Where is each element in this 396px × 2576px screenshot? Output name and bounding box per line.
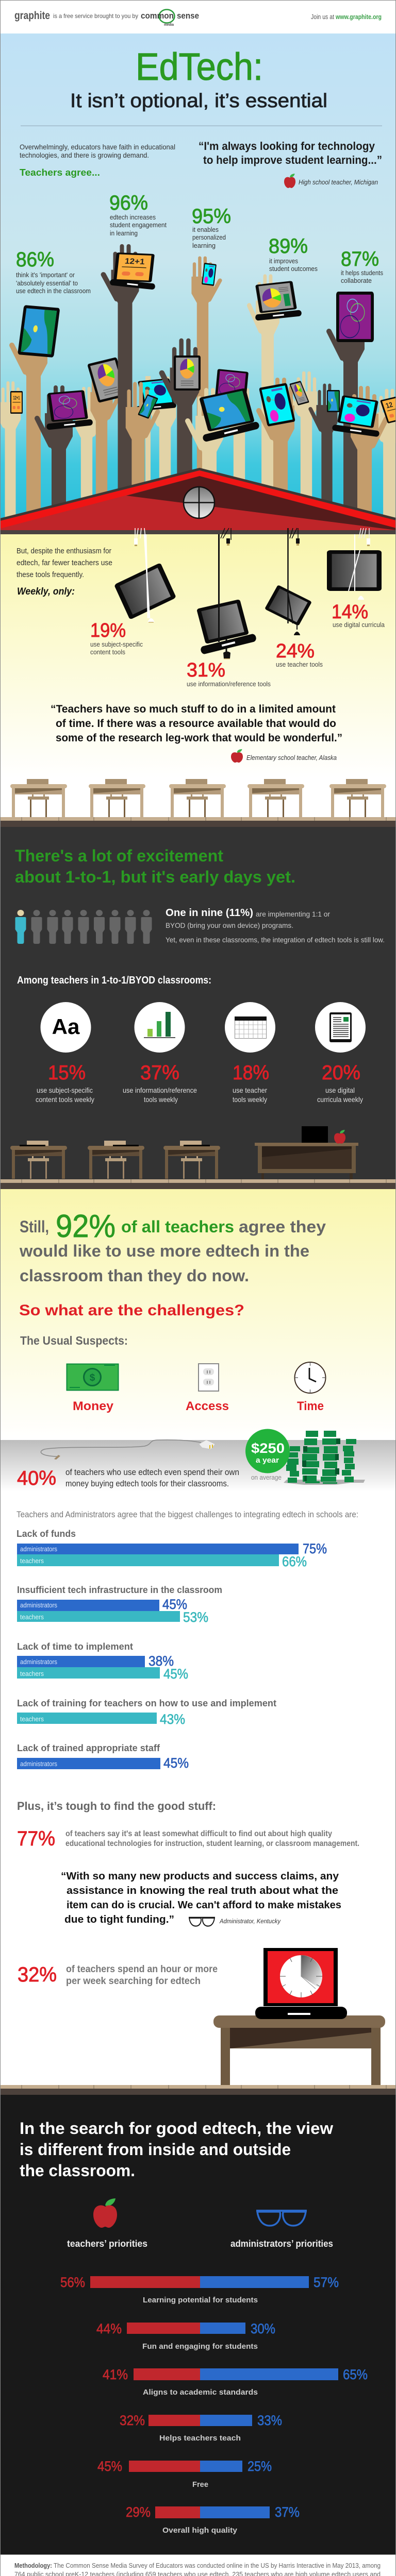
heading: tough to find: Plus, it’s tough to find the good stuff: — [17, 1800, 216, 1812]
stat: 18%: tools weekly — [233, 1095, 267, 1104]
chart: insufficient infrastructure — [17, 1585, 222, 1625]
hand: tan, network tablet — [259, 380, 295, 673]
stat: 86% — [16, 248, 91, 295]
hand: dark, math laptop: 12+1 — [124, 256, 145, 266]
logo: common sense media: media — [164, 23, 174, 27]
intro text: weekly use: But, despite the enthusiasm for — [16, 547, 111, 555]
panel: priorities (black) — [0, 2095, 396, 2554]
badge: $250 a year — [245, 1429, 290, 1473]
stat: 89%: it improves — [269, 258, 298, 265]
chart: lack of time: Lack of time to implement — [17, 1641, 133, 1652]
bar: learning potential: 57% — [314, 2275, 339, 2290]
bar: academic standards: 41% — [103, 2367, 128, 2382]
hand: tan, phone — [191, 258, 220, 472]
stat: 15% — [36, 1062, 94, 1104]
stat: 31%: use information/reference tools — [187, 681, 271, 688]
bar: fun and engaging: Fun and engaging for students — [142, 2342, 258, 2351]
stat: 37%: tools weekly — [144, 1095, 178, 1104]
icon: money stack — [284, 1431, 365, 1485]
bar: fun and engaging: 30% — [251, 2321, 275, 2336]
chart: insufficient infrastructure: Insufficient tech infrastructure in the classroom — [17, 1585, 222, 1595]
statement: 92% of teachers: Still, — [20, 1217, 49, 1236]
label: teachers' priorities: teachers’ priorities — [67, 2239, 147, 2249]
bar: fun and engaging: 44% — [96, 2321, 122, 2336]
heading: among teachers: Among teachers in 1-to-1/BYOD classrooms: — [17, 975, 211, 986]
roof with window — [0, 468, 396, 534]
heading: 1-to-1 — [15, 846, 295, 886]
intro text: weekly use: these tools frequently. — [16, 571, 84, 579]
statement: 92% of teachers: would like to use more edtech in the — [19, 1242, 309, 1260]
classroom desks row — [0, 779, 396, 827]
badge: $250 a year: a year — [256, 1456, 279, 1465]
stat: 19%: use subject-specific — [90, 641, 143, 648]
chart: lack of time: 45% — [163, 1666, 188, 1682]
stat: 86%: 'absolutely essential' to — [16, 280, 78, 287]
quote attribution: High school teacher, Michigan — [299, 179, 378, 186]
text: one in nine: are implementing 1:1 or — [256, 910, 330, 918]
stat: 15%: 15% — [48, 1062, 86, 1084]
chart: lack of time: teachers — [20, 1670, 44, 1677]
laptop on teacher desk — [302, 1126, 328, 1143]
methodology text — [0, 2554, 396, 2576]
stat: 95%: personalized — [192, 234, 226, 241]
heading: good edtech: In the search for good edtech, the view — [20, 2119, 333, 2138]
phone: pie — [289, 381, 309, 405]
chart: lack of training: 43% — [160, 1711, 185, 1727]
stat: 18%: 18% — [233, 1062, 269, 1084]
label: access: Access — [186, 1399, 229, 1413]
stat: 19%: content tools — [90, 649, 125, 656]
stat: 14%: use digital curricula — [333, 621, 385, 629]
round window — [184, 487, 214, 518]
label: administrators' priorities: administrators’ priorities — [230, 2239, 333, 2249]
statement: 92% of teachers: classroom than they do now. — [20, 1266, 249, 1285]
chart: insufficient infrastructure: teachers — [20, 1613, 44, 1621]
panel: grey fade — [0, 1440, 396, 1492]
stat: 14% — [332, 601, 385, 629]
icon: glasses, administrators — [256, 2211, 307, 2226]
bar: fun and engaging — [96, 2321, 275, 2351]
quote: Michigan teacher: “I'm always looking for technology — [199, 140, 375, 152]
chart: lack of funds: teachers — [20, 1557, 44, 1565]
bar: learning potential: 56% — [60, 2275, 85, 2290]
stat: 96%: edtech increases — [110, 214, 156, 221]
label: on average: on average — [251, 1474, 282, 1481]
chart: lack of funds: 75% — [303, 1541, 327, 1556]
stat: 37%: 37% — [140, 1062, 179, 1084]
chart: insufficient infrastructure: 53% — [183, 1609, 208, 1625]
chart: lack of staff — [17, 1743, 189, 1771]
text: biggest challenges intro: Teachers and Administrators agree that the biggest challenges to integrating edtech in schools are: — [16, 1510, 358, 1519]
hand: light, small math phone — [0, 383, 23, 603]
stat: 37%: use information/reference — [123, 1086, 197, 1094]
stat: 95%: learning — [192, 242, 216, 249]
statement: 92% of teachers: 92% — [56, 1209, 116, 1244]
stat: 86%: use edtech in the classroom — [16, 287, 91, 295]
stat: 19%: 19% — [90, 620, 126, 641]
tablet: math at right edge: 12 — [385, 400, 394, 410]
stat: 40%: of teachers who use edtech even spend their own — [65, 1468, 239, 1477]
icon: cord and plug — [41, 1440, 215, 1460]
label: time: Time — [297, 1399, 324, 1413]
intro text: Overwhelmingly, educators have faith in educational — [20, 143, 175, 151]
quote: Alaska teacher: of time. If there was a resource available that would do — [56, 718, 336, 730]
stat: 15%: content tools weekly — [36, 1095, 94, 1104]
hand: dark, venn laptop — [37, 387, 93, 681]
icon: apple on teacher desk — [334, 1130, 345, 1144]
bar: high quality: 37% — [275, 2504, 300, 2520]
chart: lack of training — [17, 1698, 276, 1727]
hanging laptop: 31% — [196, 534, 257, 659]
quote: Michigan teacher — [199, 140, 382, 166]
stat: 31%: 31% — [187, 659, 225, 681]
text: one in nine: Yet, even in these classrooms, the integration of edtech tools is still low. — [166, 936, 385, 944]
title: EdTech: — [136, 45, 263, 88]
heading: good edtech: is different from inside and outside — [20, 2140, 291, 2159]
badge: $250 a year: $250 — [251, 1440, 285, 1456]
hanging tablet: 19% — [114, 534, 176, 622]
laptop — [255, 1948, 347, 2019]
chart: lack of training: Lack of training for teachers on how to use and implement — [17, 1698, 276, 1708]
header link — [311, 13, 382, 21]
stat: 18% — [233, 1062, 269, 1104]
logo: graphite: graphite — [14, 10, 50, 22]
icon: tablet circle — [315, 1002, 366, 1053]
stat: 87% — [341, 248, 383, 284]
icon: calendar circle — [225, 1002, 275, 1053]
bar: learning potential: Learning potential for students — [143, 2296, 258, 2304]
illustration: laptop clock on desk — [213, 1948, 385, 2085]
stat: 95%: 95% — [192, 205, 231, 228]
bar: free: Free — [192, 2480, 208, 2489]
quote attribution: Administrator, Kentucky — [219, 1919, 281, 1925]
stat: 95%: it enables — [192, 226, 219, 233]
stat: 77%: 77% — [17, 1827, 55, 1850]
stat: 32% — [18, 1963, 218, 1987]
stat: 96%: in learning — [110, 230, 138, 237]
heading: 1-to-1: There's a lot of excitement — [15, 846, 223, 865]
bar: learning potential — [60, 2275, 339, 2304]
hand: tan, map tablet — [12, 305, 60, 608]
logo: common sense media: common — [141, 11, 174, 21]
bar: helps teachers: 33% — [257, 2413, 282, 2428]
chart: lack of funds — [16, 1529, 327, 1569]
stat: 89% — [269, 235, 318, 273]
stat: 40% — [17, 1467, 239, 1489]
people icons: one in nine — [15, 910, 152, 944]
bar: free: 45% — [97, 2459, 122, 2474]
stat: 18%: use teacher — [233, 1086, 267, 1094]
stat: 24%: 24% — [276, 640, 315, 662]
text: one in nine: BYOD (bring your own device) programs. — [166, 921, 293, 929]
quote: Kentucky administrator: assistance in knowing the real truth about what the — [67, 1885, 338, 1896]
stat: 32%: of teachers spend an hour or more — [66, 1964, 218, 1975]
hanging tablet: 14% — [327, 534, 382, 600]
label: money: Money — [73, 1399, 114, 1413]
chart: lack of funds: administrators — [20, 1545, 57, 1553]
icon: apple — [284, 174, 295, 188]
stat: 87%: collaborate — [341, 277, 372, 284]
header bar — [14, 9, 382, 27]
quote: Michigan teacher: to help improve student learning...” — [203, 154, 382, 166]
hand: dark, venn tablet — [329, 292, 374, 594]
stat: 89%: 89% — [269, 235, 308, 258]
hand: dark, pie tablet — [162, 341, 201, 649]
heading: 1-to-1: about 1-to-1, but it's early days yet. — [15, 868, 295, 886]
chart: lack of staff: administrators — [20, 1760, 57, 1768]
hanging cords top — [135, 528, 369, 540]
text: one in nine: One in nine (11%) — [166, 907, 253, 919]
hand: dark, math laptop — [103, 246, 155, 516]
quote: Alaska teacher — [51, 703, 342, 744]
statement: 92% of teachers — [19, 1209, 326, 1285]
stat: 32%: per week searching for edtech — [66, 1976, 201, 1987]
quote attribution: Elementary school teacher, Alaska — [246, 754, 337, 761]
stat: 37% — [123, 1062, 197, 1104]
chart: lack of staff: 45% — [163, 1755, 189, 1771]
stat: 24%: use teacher tools — [276, 661, 323, 668]
hand: tan, map phone — [126, 384, 158, 648]
stat: 87%: it helps students — [341, 269, 383, 277]
header tagline: is a free service brought to you by — [53, 12, 138, 20]
stat: 95% — [192, 205, 231, 249]
intro text — [20, 143, 175, 159]
illustration: raised hands holding devices — [0, 246, 396, 684]
stat: 87%: 87% — [341, 248, 379, 270]
subheading: usual suspects: The Usual Suspects: — [20, 1334, 128, 1347]
stat: 77%: educational technologies for instruction, student learning, or classroom management. — [65, 1839, 359, 1848]
bar: helps teachers: 32% — [120, 2413, 145, 2428]
logo: common sense media — [141, 9, 199, 27]
chart: lack of funds: Lack of funds — [16, 1529, 76, 1539]
methodology text: Methodology: — [14, 2562, 52, 2569]
stat: 20% — [317, 1062, 363, 1104]
chart: lack of time — [17, 1641, 188, 1682]
stat: 40%: 40% — [17, 1467, 56, 1489]
header link: www.graphite.org — [335, 13, 382, 21]
stat: 15%: use subject-specific — [37, 1086, 93, 1094]
hand: light, map laptop with venn tablet behind — [188, 369, 260, 684]
stat: 77%: of teachers say it's at least somewhat difficult to find out about high quality — [65, 1829, 332, 1838]
icon: bar chart circle — [134, 1002, 185, 1053]
panel: weekly use (yellow fade) — [0, 534, 396, 778]
icon: Aa circle — [40, 1002, 91, 1053]
light arms in background — [75, 373, 396, 640]
statement: 92% of teachers: of all teachers — [121, 1217, 234, 1236]
icon: glasses — [189, 1918, 215, 1926]
heading: good edtech: the classroom. — [20, 2161, 135, 2180]
icon: clock — [295, 1362, 326, 1393]
hand: tan, pie tablet — [87, 357, 128, 606]
hand: tan, network laptop — [332, 388, 386, 682]
stat: 96%: 96% — [109, 192, 148, 214]
bar: high quality: 29% — [126, 2504, 151, 2520]
bar: academic standards: 65% — [343, 2367, 368, 2382]
stat: 20%: 20% — [322, 1062, 360, 1084]
chart: insufficient infrastructure: administrators — [20, 1601, 57, 1609]
stat: 40%: money buying edtech tools for their classrooms. — [65, 1479, 229, 1488]
stat: 31% — [187, 659, 271, 688]
icon: apple, teachers — [93, 2198, 117, 2228]
floor — [0, 2085, 396, 2095]
stat: 32%: 32% — [18, 1963, 57, 1986]
quote: Alaska teacher: some of the research leg-work that would be wonderful.” — [56, 732, 342, 744]
bar: academic standards — [103, 2367, 368, 2397]
icon: Aa circle: Aa — [52, 1014, 80, 1039]
statement: 92% of teachers: agree they — [239, 1217, 326, 1236]
bar: free — [97, 2459, 272, 2489]
quote: Alaska teacher: “Teachers have so much stuff to do in a limited amount — [51, 703, 336, 715]
intro text: weekly use — [16, 547, 112, 579]
icon: money: $ — [90, 1372, 95, 1383]
icon: money — [67, 1364, 119, 1390]
bar: high quality: Overall high quality — [162, 2526, 238, 2535]
stat: 20%: curricula weekly — [317, 1095, 363, 1104]
chart: lack of time: administrators — [20, 1658, 57, 1666]
icon: outlet — [199, 1364, 219, 1391]
chart: lack of training: teachers — [20, 1715, 44, 1723]
intro text: technologies, and there is growing demand. — [20, 151, 149, 159]
panel: challenges (yellow fade) — [0, 1189, 396, 1440]
bar: helps teachers: Helps teachers teach — [159, 2434, 241, 2443]
stat: 96%: student engagement — [110, 222, 167, 229]
stat: 19% — [90, 620, 143, 656]
desk — [213, 2015, 385, 2085]
chart: lack of time: 38% — [148, 1653, 174, 1669]
icon: apple — [231, 749, 243, 762]
subtitle: It isn’t optional, it’s essential — [70, 90, 327, 112]
text: one in nine — [166, 907, 385, 944]
hand: light, laptop with pie chart — [249, 276, 302, 555]
bar: helps teachers — [120, 2413, 282, 2443]
bar: free: 25% — [248, 2459, 272, 2474]
heading: weekly only: Weekly, only: — [17, 586, 75, 597]
stat: 86%: 86% — [16, 248, 54, 271]
intro text: weekly use: edtech, far fewer teachers use — [16, 559, 112, 567]
stat: 20%: use digital — [325, 1086, 355, 1094]
hand: light, network laptop — [136, 378, 176, 613]
header link: Join us at — [311, 13, 334, 21]
quote: Kentucky administrator: due to tight funding.” — [64, 1914, 174, 1925]
heading: good edtech — [20, 2119, 333, 2180]
quote: Kentucky administrator: item can do is crucial. We can't afford to make mistakes — [67, 1900, 341, 1911]
stat: 89%: student outcomes — [269, 265, 318, 273]
teacher desk — [255, 1143, 358, 1179]
hanging tablet: 24% — [265, 528, 312, 635]
bar: high quality — [126, 2504, 300, 2535]
quote: Kentucky administrator — [61, 1871, 341, 1925]
chart: insufficient infrastructure: 45% — [162, 1597, 187, 1612]
heading: challenges: So what are the challenges? — [19, 1302, 244, 1319]
tablet: math at right edge — [380, 396, 396, 423]
stat: 14%: 14% — [332, 601, 368, 623]
chart: lack of staff: Lack of trained appropriate staff — [17, 1743, 160, 1753]
stat: 24% — [276, 640, 323, 668]
heading: teachers agree: Teachers agree... — [20, 167, 100, 178]
classroom desks with teacher desk — [0, 1126, 396, 1189]
hand: dark, map phone — [310, 385, 340, 611]
stat: 96% — [109, 192, 167, 237]
panel: 1-to-1 (dark) — [0, 827, 396, 1179]
bar: academic standards: Aligns to academic standards — [143, 2388, 258, 2397]
quote: Kentucky administrator: “With so many new products and success claims, any — [61, 1871, 339, 1882]
stat: 86%: think it's 'important' or — [16, 272, 75, 279]
logo: common sense media: sense — [177, 11, 199, 21]
hand: light, small math phone: 12+1 — [13, 395, 20, 401]
stat: 77% — [17, 1827, 359, 1850]
chart: lack of funds: 66% — [282, 1554, 307, 1569]
